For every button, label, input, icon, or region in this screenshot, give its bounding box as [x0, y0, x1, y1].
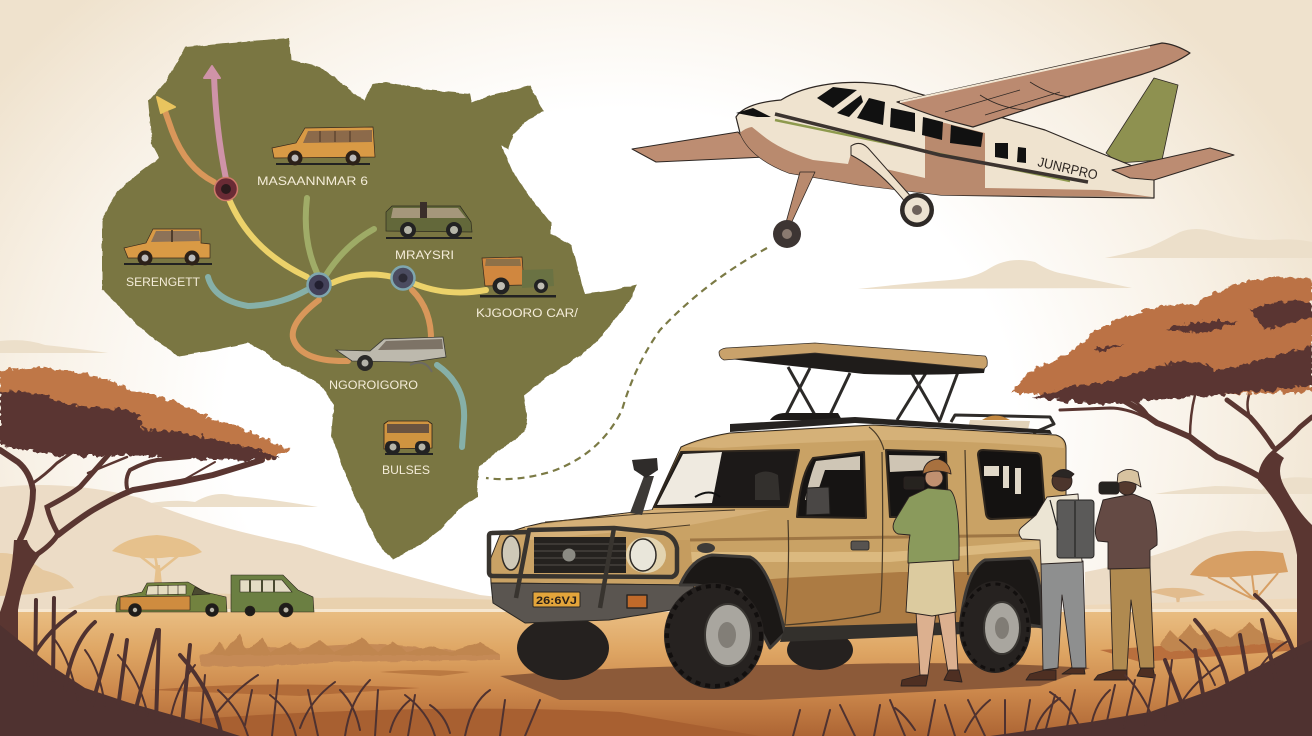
head [1118, 477, 1136, 495]
left distant tree [112, 535, 202, 584]
canopy dark [1032, 345, 1312, 404]
plane fuselage [736, 82, 1154, 198]
clouds [0, 229, 1312, 507]
thick left blades [28, 598, 222, 736]
side highlight [690, 540, 1050, 562]
back window light [984, 466, 1021, 494]
vehicle: green open-top [386, 202, 472, 239]
camera [904, 477, 924, 489]
bumper [491, 583, 694, 623]
grille [534, 537, 626, 573]
small far trees [1150, 588, 1205, 612]
front fender [675, 540, 694, 585]
truck shadow [500, 663, 1090, 700]
green van [231, 575, 314, 612]
hat [1117, 469, 1141, 487]
nose gear [785, 172, 815, 228]
plane registration text: JUNRPRO [1036, 154, 1099, 183]
route nodes [214, 178, 414, 296]
rear door window [886, 450, 948, 517]
windshield [654, 450, 799, 507]
boots [901, 675, 928, 686]
person in brown jacket [1094, 469, 1157, 680]
shoes [1094, 670, 1127, 680]
thin left blades [55, 640, 540, 736]
person with backpack [1019, 469, 1094, 680]
horizon haze left [60, 593, 560, 612]
front wheel [664, 583, 764, 689]
savanna ground [0, 609, 1312, 736]
tree branches [0, 447, 262, 557]
side mirror [806, 487, 830, 515]
right dark mass [990, 640, 1312, 736]
lower body band [690, 572, 1042, 636]
door lines [785, 427, 968, 625]
roof highlight [683, 426, 1064, 448]
map labels: MRAYSRI [395, 250, 454, 262]
pop-top roof [719, 343, 987, 375]
back window [978, 450, 1045, 519]
head [1052, 471, 1072, 491]
distant hills [0, 485, 1312, 612]
vehicle: bus front view [384, 421, 433, 455]
dashed flight path [486, 248, 767, 479]
left dark mass [0, 625, 240, 736]
thin right blades [793, 640, 1290, 736]
far wheels [517, 616, 853, 680]
vehicle: orange pickup [124, 229, 212, 266]
green and orange wagon [116, 582, 227, 612]
right acacia tree [1012, 278, 1312, 660]
left acacia tree [0, 367, 290, 720]
fuselage lower shade [740, 118, 1152, 197]
front door window [797, 452, 866, 518]
pop-top struts [786, 363, 958, 422]
map labels: SERENGETT [126, 277, 200, 289]
canopy orange [1012, 278, 1312, 398]
head [925, 469, 943, 487]
plane far wing [632, 132, 765, 162]
windshield glare [657, 452, 722, 505]
tree branches [1060, 392, 1312, 478]
white shirt [1019, 494, 1082, 564]
main wheel [900, 193, 934, 227]
canopy dark [0, 391, 280, 460]
tail fin [1106, 78, 1178, 163]
hood crease [545, 510, 735, 530]
backpack seam [1050, 500, 1075, 557]
rear door window light [889, 455, 940, 472]
map labels: KJGOORO CAR/ [476, 308, 579, 320]
foreground grass [0, 595, 1312, 736]
far left tree [0, 553, 74, 596]
side dark stripe [690, 535, 1045, 540]
tan trousers [1110, 566, 1154, 670]
background safari vehicles [116, 575, 314, 617]
map labels: MASAANNMAR 6 [257, 176, 368, 188]
snorkel [630, 458, 658, 515]
mid-ground grass [210, 622, 1285, 655]
map labels [126, 176, 579, 477]
arrowheads [157, 66, 220, 113]
truck body [490, 425, 1066, 636]
map of Africa [102, 38, 637, 559]
license plate: 26:6VJ [536, 595, 577, 607]
airplane [632, 43, 1234, 248]
hood [525, 510, 770, 540]
trunk base [0, 540, 40, 720]
seat silhouettes [755, 472, 780, 500]
hat [923, 459, 951, 474]
right distant tree [1190, 551, 1288, 625]
roof rack [730, 413, 1054, 434]
vehicle: orange and green truck [480, 257, 556, 298]
thick right blades [1165, 595, 1296, 712]
bull bar [489, 528, 677, 608]
trousers [1041, 561, 1086, 670]
camera [1099, 482, 1119, 494]
shoes [1026, 670, 1056, 680]
person in green shirt [893, 459, 962, 686]
door handles [851, 541, 869, 550]
trunk [1258, 450, 1312, 660]
indicator [697, 543, 715, 553]
brown jacket [1095, 494, 1157, 569]
nose wheel [773, 220, 801, 248]
main gear strut [851, 143, 914, 203]
horizon haze right [1085, 598, 1312, 612]
map labels: NGOROIGORO [329, 380, 418, 392]
wing flap lines [945, 82, 1070, 115]
legs [916, 612, 936, 675]
route lines [165, 76, 486, 447]
wheel arch and sill [680, 555, 785, 648]
big safari truck [489, 343, 1090, 700]
shorts [906, 560, 956, 616]
fog light [627, 595, 647, 608]
front window light [805, 456, 860, 500]
plane windows [736, 87, 1026, 163]
vehicle: silver van [336, 337, 446, 372]
tailplane [1112, 148, 1234, 180]
backpack [1057, 500, 1094, 558]
shirt [893, 488, 959, 563]
map labels: BULSES [382, 465, 430, 477]
headlights [502, 536, 666, 573]
main stripe [775, 114, 1088, 182]
vehicle: orange safari wagon [272, 127, 375, 166]
plane upper wing [897, 43, 1190, 127]
photographers [893, 459, 1157, 686]
wing highlight [900, 47, 1150, 102]
canopy dark patches [1095, 301, 1312, 353]
rear wheel [959, 581, 1031, 673]
fuselage green stripe [775, 120, 1070, 181]
distant trees [0, 535, 1312, 625]
license plate [533, 592, 580, 607]
canopy orange [0, 367, 290, 460]
steering wheel [695, 492, 720, 497]
